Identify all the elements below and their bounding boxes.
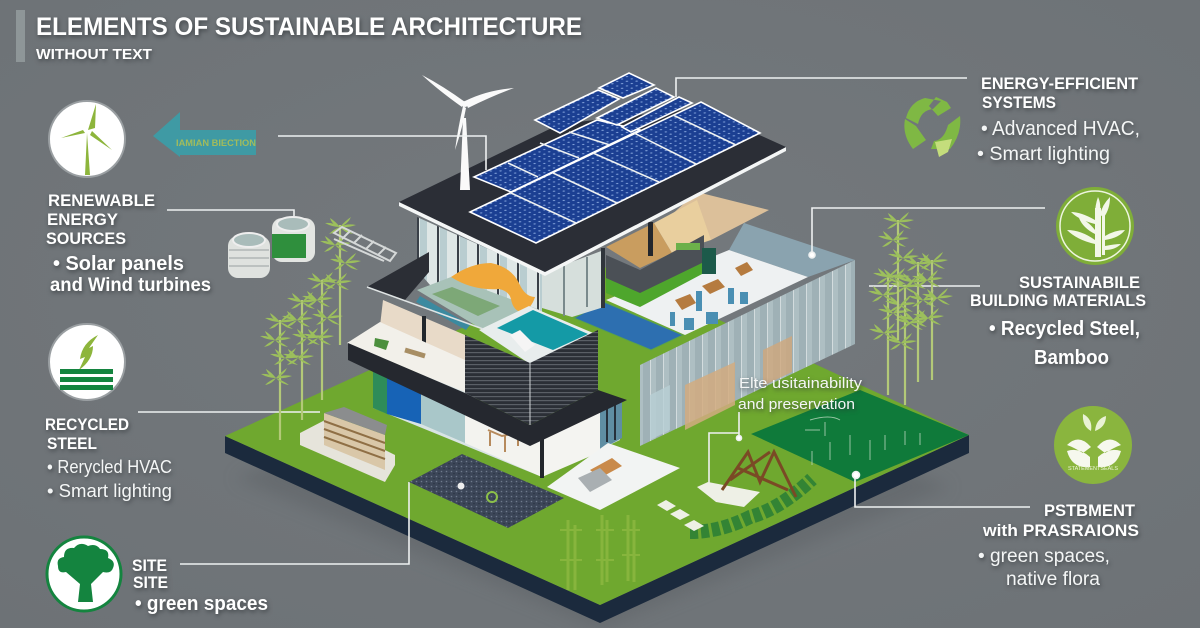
- bamboo grove left: [260, 217, 361, 440]
- direction arrow: [153, 112, 256, 157]
- panel: sustainable building materials: SUSTAINABILE: [1019, 273, 1140, 292]
- panel: preservation: • green spaces,: [978, 546, 1110, 567]
- icon: leaves and birds: [1054, 406, 1132, 484]
- panel: energy-efficient systems: ENERGY-EFFICIENT: [981, 74, 1139, 93]
- title: ELEMENTS OF SUSTAINABLE ARCHITECTURE: [36, 13, 582, 41]
- panel: sustainable building materials: BUILDING MATERIALS: [970, 291, 1146, 310]
- glass pavilion: [606, 223, 855, 446]
- panel: preservation: [978, 501, 1139, 590]
- site label on platform: and preservation: [738, 396, 855, 413]
- louvered dark wall block: [465, 330, 598, 425]
- site label on platform: [738, 375, 863, 413]
- panel: recycled steel: • Smart lighting: [47, 481, 172, 501]
- second-floor wall: [347, 287, 483, 393]
- site label on platform: Elte usitainability: [739, 375, 863, 392]
- faded bamboo on lawn: [560, 515, 640, 590]
- lower-level roof slab: [367, 252, 429, 300]
- panel: sustainable building materials: [970, 273, 1146, 369]
- lower-floor glazing: [373, 355, 622, 478]
- panel: energy-efficient systems: • Smart lighting: [977, 144, 1110, 165]
- icon: bamboo: [1056, 187, 1134, 265]
- panel: recycled steel: [45, 415, 172, 501]
- panel: renewable energy: ENERGY: [47, 210, 119, 229]
- panel: energy-efficient systems: • Advanced HVAC,: [981, 118, 1140, 140]
- panel: site: • green spaces: [135, 593, 268, 615]
- outdoor living terrace with orange canopy: [416, 263, 540, 330]
- panel: site: SITE: [132, 556, 167, 575]
- panel: recycled steel: • Rerycled HVAC: [47, 457, 172, 477]
- dark green preservation area: [751, 390, 969, 482]
- direction arrow: IAMIAN BIECTION: [176, 138, 256, 148]
- panel: sustainable building materials: Bamboo: [1034, 347, 1109, 369]
- bamboo grove right: [868, 212, 953, 405]
- interior rooms: [606, 192, 769, 307]
- terrace furniture: [670, 262, 753, 330]
- dark overhang: [348, 343, 627, 446]
- panel: sustainable building materials: • Recycled Steel,: [989, 318, 1140, 340]
- icon: leaves and birds: STATEMENTSEALS: [1068, 466, 1119, 472]
- title: WITHOUT TEXT: [36, 46, 152, 63]
- main dark roof: [399, 108, 786, 276]
- wind turbine: [422, 75, 514, 190]
- panel: recycled steel: RECYCLED: [45, 415, 129, 434]
- rooftop pergola structure: [334, 227, 396, 261]
- callout lines: [138, 78, 1045, 564]
- panel: renewable energy: RENEWABLE: [48, 191, 155, 210]
- icon: recycle: [904, 97, 960, 157]
- icon: tree: [47, 537, 121, 611]
- panel: preservation: with PRASRAIONS: [982, 521, 1139, 540]
- pool: solar blue: [574, 302, 683, 350]
- ground shadow: [235, 420, 950, 628]
- title: [16, 10, 582, 63]
- garden trellis and planting: [657, 452, 812, 532]
- solar panel arrays: [470, 73, 760, 243]
- panel: renewable energy: • Solar panels: [53, 253, 184, 275]
- teal rooftop pool: [479, 306, 598, 364]
- panel: site: SITE: [133, 573, 168, 592]
- preservation area details: [805, 417, 920, 465]
- panel: renewable energy: SOURCES: [46, 229, 126, 248]
- isometric green site platform: [225, 265, 969, 623]
- icon: energy bolt: [49, 324, 125, 400]
- icon: wind turbine: [49, 101, 125, 177]
- panel: renewable energy: and Wind turbines: [50, 275, 211, 296]
- panel: recycled steel: STEEL: [47, 434, 97, 453]
- panel: energy-efficient systems: SYSTEMS: [982, 93, 1056, 112]
- water tanks: [228, 217, 315, 278]
- panel: renewable energy: [46, 191, 211, 296]
- small apartment building: [300, 407, 395, 482]
- gravel path: [409, 454, 564, 528]
- panel: preservation: native flora: [1006, 569, 1100, 590]
- panel: preservation: PSTBMENT: [1044, 501, 1136, 520]
- white patio: [547, 443, 680, 510]
- panel: energy-efficient systems: [977, 74, 1140, 165]
- upper glass facade: [417, 217, 653, 320]
- green planter: [606, 262, 704, 307]
- panel: site: [132, 556, 268, 615]
